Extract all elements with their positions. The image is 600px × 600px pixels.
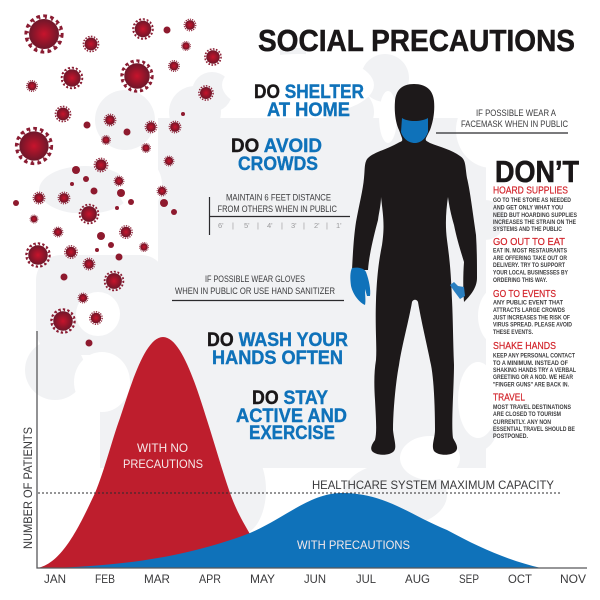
item: go to events: ATTRACTS LARGE CROWDS [493, 307, 565, 314]
item: hoard supplies: NEED BUT HOARDING SUPPLIES [493, 212, 577, 219]
callout: six feet distance ruler: 1' [336, 221, 342, 230]
item: shake hands [493, 340, 576, 388]
label: with precautions: WITH PRECAUTIONS [297, 538, 410, 552]
label: with no precautions: PRECAUTIONS [123, 457, 203, 471]
callout: wear a facemask: FACEMASK WHEN IN PUBLIC [461, 119, 568, 129]
item: travel: ESSENTIAL TRAVEL SHOULD BE [493, 426, 575, 433]
item: shake hands: SHAKING HANDS TRY A VERBAL [493, 367, 576, 374]
label: healthcare capacity: HEALTHCARE SYSTEM MAXIMUM CAPACITY [312, 478, 554, 492]
item: travel [493, 392, 575, 440]
item: go to events [493, 288, 572, 336]
item: hoard supplies: SYSTEMS AND THE PUBLIC [493, 226, 562, 233]
item: go out to eat [493, 236, 569, 284]
month labels: MAY [250, 572, 275, 586]
callout: wear a facemask [436, 108, 568, 133]
item: hoard supplies [493, 184, 577, 233]
month labels: JUL [356, 572, 376, 586]
heading: do wash your hands often: DO WASH YOUR [207, 330, 348, 351]
item: go out to eat: EAT IN. MOST RESTAURANTS [493, 248, 567, 255]
heading: do wash your hands often [207, 330, 348, 369]
callout: six feet distance ruler: | [303, 221, 305, 230]
curve: with no precautions [37, 337, 250, 568]
background: pale virus silhouette [25, 48, 528, 535]
item: travel: POSTPONED. [493, 433, 528, 440]
month labels: NOV [560, 572, 586, 586]
item: travel: CURRENTLY. ANY NON [493, 419, 551, 426]
heading: do shelter at home [254, 82, 364, 121]
month labels: AUG [405, 572, 430, 586]
item: go out to eat: ARE OFFERING TAKE OUT OR [493, 255, 567, 262]
item: go out to eat: GO OUT TO EAT [493, 236, 566, 248]
callout: six feet distance ruler: FROM OTHERS WHEN IN PUBLIC [218, 204, 337, 214]
item: shake hands: GREETING OR A NOD. WE HEAR [493, 374, 573, 381]
item: hoard supplies: AND GET ONLY WHAT YOU [493, 204, 563, 212]
heading: do shelter at home: DO SHELTER [254, 82, 364, 103]
capacity threshold line [38, 492, 562, 494]
month labels: SEP [459, 572, 479, 586]
label: with no precautions: WITH NO [137, 441, 188, 455]
face mask [401, 118, 428, 143]
item: shake hands: TO A MINIMUM. INSTEAD OF [493, 360, 568, 367]
callout: six feet distance ruler: | [257, 221, 259, 230]
item: go to events: GO TO EVENTS [493, 288, 556, 300]
item: travel: ARE CLOSED TO TOURISM [493, 411, 561, 418]
item: travel: MOST TRAVEL DESTINATIONS [493, 404, 571, 411]
month labels: FEB [95, 572, 115, 586]
callout: wear gloves: WHEN IN PUBLIC OR USE HAND SANITIZER [175, 286, 335, 296]
item: go out to eat: YOUR LOCAL BUSINESSES BY [493, 270, 569, 276]
item: go to events: ANY PUBLIC EVENT THAT [493, 300, 563, 307]
callout: six feet distance ruler: 3' [291, 221, 297, 230]
silhouette [352, 84, 477, 455]
axes [37, 331, 587, 568]
item: hoard supplies: INCREASES THE STRAIN ON THE [493, 219, 576, 226]
callout: wear a facemask: IF POSSIBLE WEAR A [476, 108, 556, 118]
heading: do stay active and exercise: DO STAY [252, 388, 328, 409]
callout: wear gloves: IF POSSIBLE WEAR GLOVES [205, 274, 305, 284]
curve: with precautions [52, 493, 541, 568]
figure: person with mask and gloves [350, 84, 477, 455]
callout: six feet distance ruler: | [232, 221, 234, 230]
month labels [44, 572, 586, 586]
callout: six feet distance ruler: 6' [218, 221, 224, 230]
item: go out to eat: DELIVERY. TRY TO SUPPORT [493, 262, 565, 269]
item: hoard supplies: HOARD SUPPLIES [493, 184, 568, 196]
left glove [350, 268, 370, 305]
callout: six feet distance ruler [209, 192, 350, 235]
heading: do shelter at home: AT HOME [267, 100, 350, 121]
month labels: JUN [304, 572, 326, 586]
chart: epidemic curves [21, 331, 587, 586]
heading: do avoid crowds [231, 136, 322, 175]
y axis label: NUMBER OF PATIENTS [21, 427, 35, 549]
heading: do avoid crowds: DO AVOID [231, 136, 322, 157]
heading: do stay active and exercise [236, 388, 347, 444]
item: go to events: VIRUS SPREAD. PLEASE AVOID [493, 322, 572, 329]
callout: six feet distance ruler: 2' [314, 221, 320, 230]
label: with no precautions [123, 441, 203, 471]
item: hoard supplies: GO TO THE STORE AS NEEDED [493, 197, 571, 204]
callout: six feet distance ruler: | [281, 221, 283, 230]
callout: six feet distance ruler: 5' [244, 221, 250, 230]
item: shake hands: SHAKE HANDS [493, 340, 556, 352]
month labels: OCT [508, 572, 533, 586]
month labels: APR [199, 572, 221, 586]
item: travel: TRAVEL [493, 392, 525, 404]
title: SOCIAL PRECAUTIONS [258, 23, 575, 58]
month labels: JAN [44, 572, 66, 586]
month labels: MAR [144, 572, 170, 586]
item: shake hands: KEEP ANY PERSONAL CONTACT [493, 353, 575, 360]
callout: six feet distance ruler: | [326, 221, 328, 230]
callout: wear gloves [172, 274, 344, 300]
heading: do stay active and exercise: ACTIVE AND [236, 406, 347, 427]
heading: do stay active and exercise: EXERCISE [249, 423, 335, 444]
callout: six feet distance ruler: 4' [267, 221, 273, 230]
item: shake hands: "FINGER GUNS" ARE BACK IN. [493, 382, 569, 388]
hand sanitizer [450, 282, 465, 299]
heading: do avoid crowds: CROWDS [238, 154, 318, 175]
item: go to events: JUST INCREASES THE RISK OF [493, 314, 570, 321]
heading: do wash your hands often: HANDS OFTEN [212, 348, 343, 369]
heading: don't: DON’T [495, 154, 579, 189]
item: go to events: THESE EVENTS. [493, 329, 533, 336]
item: go out to eat: ORDERING THIS WAY. [493, 277, 547, 284]
virus particles [13, 16, 221, 347]
panel: don't list [493, 154, 579, 440]
callout: six feet distance ruler: MAINTAIN 6 FEET DISTANCE [226, 192, 331, 202]
